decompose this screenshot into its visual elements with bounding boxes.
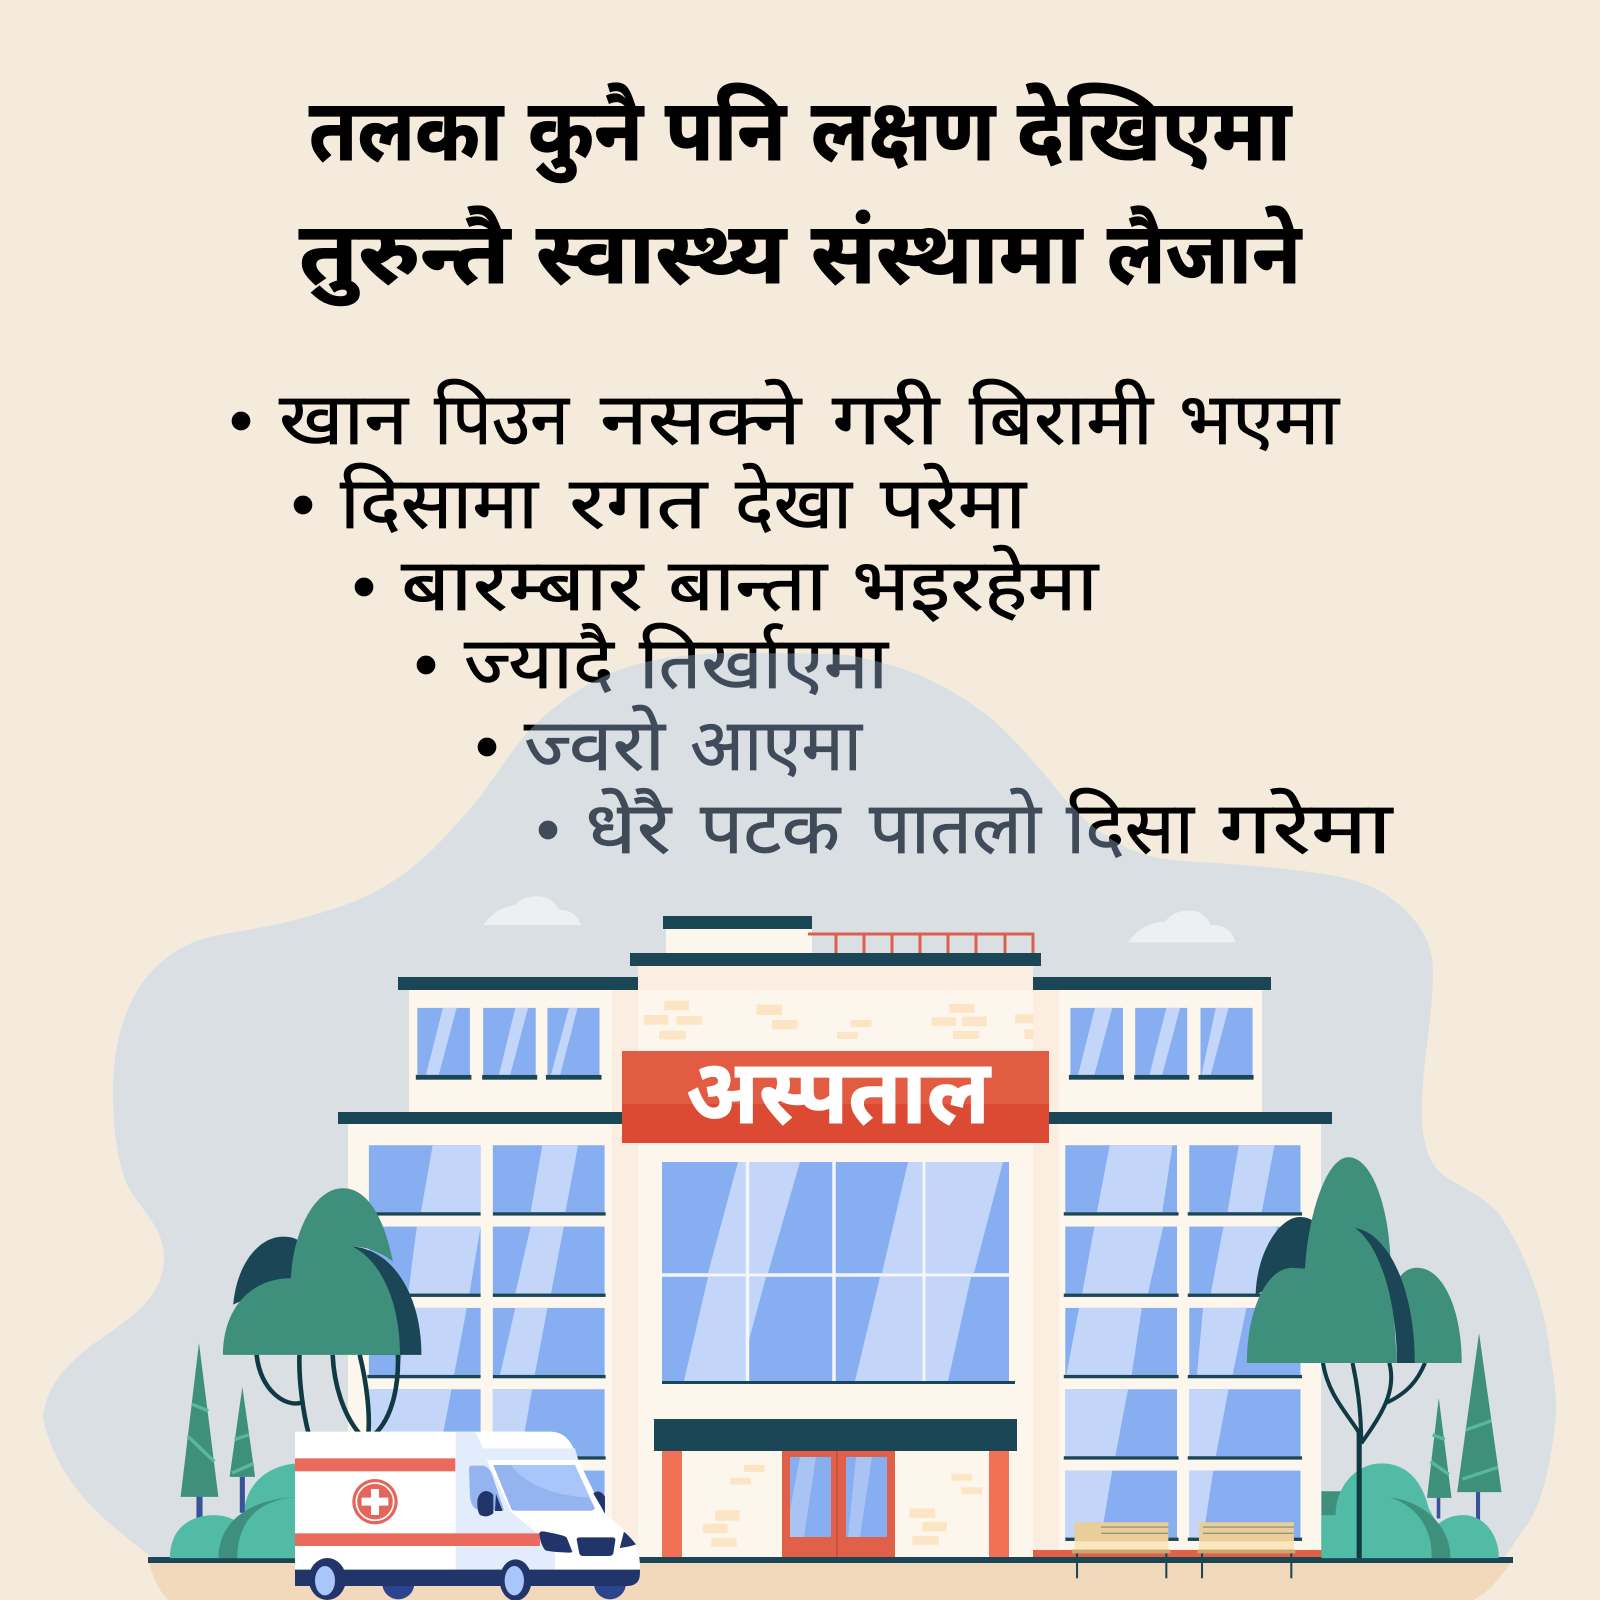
lights bbox=[539, 1531, 636, 1556]
title: कुनै bbox=[528, 82, 645, 184]
big tree bbox=[1247, 1157, 1462, 1443]
title: लक्षण bbox=[811, 83, 997, 179]
symptoms list: देखा bbox=[735, 462, 853, 544]
upper wings bbox=[409, 990, 612, 1112]
symptoms list: पटक bbox=[700, 789, 842, 869]
symptoms list: बिरामी bbox=[969, 379, 1154, 460]
entrance bbox=[654, 1419, 1017, 1560]
side window bbox=[469, 1466, 504, 1510]
roofs bbox=[338, 916, 1332, 1124]
symptoms list: दिसा bbox=[1066, 788, 1195, 869]
main window bbox=[662, 1162, 1015, 1384]
title: लैजाने bbox=[1107, 205, 1303, 302]
symptoms list: बान्ता bbox=[668, 546, 829, 626]
ambulance bbox=[295, 1432, 640, 1600]
small trees bbox=[1427, 1333, 1502, 1522]
clouds bbox=[483, 896, 1235, 942]
symptoms list: भएमा bbox=[1179, 380, 1340, 460]
title: संस्थामा bbox=[811, 206, 1084, 302]
symptoms list: पिउन bbox=[434, 379, 570, 460]
symptoms list: धेरै bbox=[585, 787, 673, 869]
symptoms list: रगत bbox=[569, 464, 709, 544]
left trees and bushes bbox=[170, 1188, 421, 1558]
symptoms list: नसक्ने bbox=[600, 378, 802, 460]
title: देखिएमा bbox=[1017, 82, 1293, 179]
stripes bbox=[295, 1458, 540, 1546]
symptoms list: आएमा bbox=[690, 706, 863, 786]
title: स्वास्थ्य bbox=[536, 206, 787, 302]
title: पनि bbox=[665, 82, 788, 179]
wheels bbox=[309, 1558, 532, 1600]
title: तलका bbox=[309, 83, 505, 179]
symptoms list: ज्यादै bbox=[464, 623, 615, 704]
right wing windows bbox=[1064, 1008, 1302, 1541]
ground line bbox=[148, 1557, 1513, 1563]
bushes bbox=[170, 1463, 301, 1558]
right trees and bushes bbox=[1072, 1157, 1502, 1578]
symptoms list: तिर्खाएमा bbox=[639, 623, 889, 704]
symptoms list: भइरहेमा bbox=[852, 544, 1100, 626]
symptoms list: पातलो bbox=[869, 788, 1042, 869]
background blob bbox=[43, 653, 1556, 1558]
base strip bbox=[1033, 1550, 1324, 1558]
cross emblem bbox=[352, 1479, 398, 1524]
side panel bbox=[456, 1432, 578, 1570]
big tree bbox=[223, 1188, 421, 1434]
symptoms list: दिसामा bbox=[340, 463, 539, 544]
title: तुरुन्तै bbox=[299, 205, 512, 307]
windshield bbox=[487, 1460, 605, 1515]
bricks bbox=[644, 1001, 1034, 1547]
small trees bbox=[181, 1343, 255, 1520]
symptoms list: गरेमा bbox=[1219, 787, 1394, 869]
ground sand bbox=[148, 1560, 1512, 1600]
symptoms list: ज्वरो bbox=[524, 705, 666, 786]
central tower bbox=[638, 966, 1033, 1560]
railing bbox=[808, 934, 1033, 953]
bumper bbox=[295, 1570, 640, 1586]
title bbox=[299, 82, 1303, 307]
hidden wheels bbox=[382, 1567, 626, 1599]
lower wings bbox=[348, 1124, 612, 1560]
symptoms list bbox=[232, 378, 1394, 869]
bushes bbox=[1321, 1431, 1499, 1558]
symptoms list: खान bbox=[279, 380, 409, 460]
sign text: अस्पताल bbox=[686, 1043, 991, 1143]
rooftop block bbox=[666, 929, 812, 953]
symptoms list: गरी bbox=[832, 379, 941, 460]
sign board bbox=[622, 1043, 1049, 1143]
benches bbox=[1072, 1522, 1295, 1578]
seats bbox=[477, 1491, 605, 1516]
body bbox=[295, 1432, 640, 1570]
left wing windows bbox=[367, 1008, 606, 1538]
symptoms list: बारम्बार bbox=[401, 546, 645, 626]
symptoms list: परेमा bbox=[880, 462, 1027, 544]
hospital building bbox=[338, 916, 1332, 1560]
